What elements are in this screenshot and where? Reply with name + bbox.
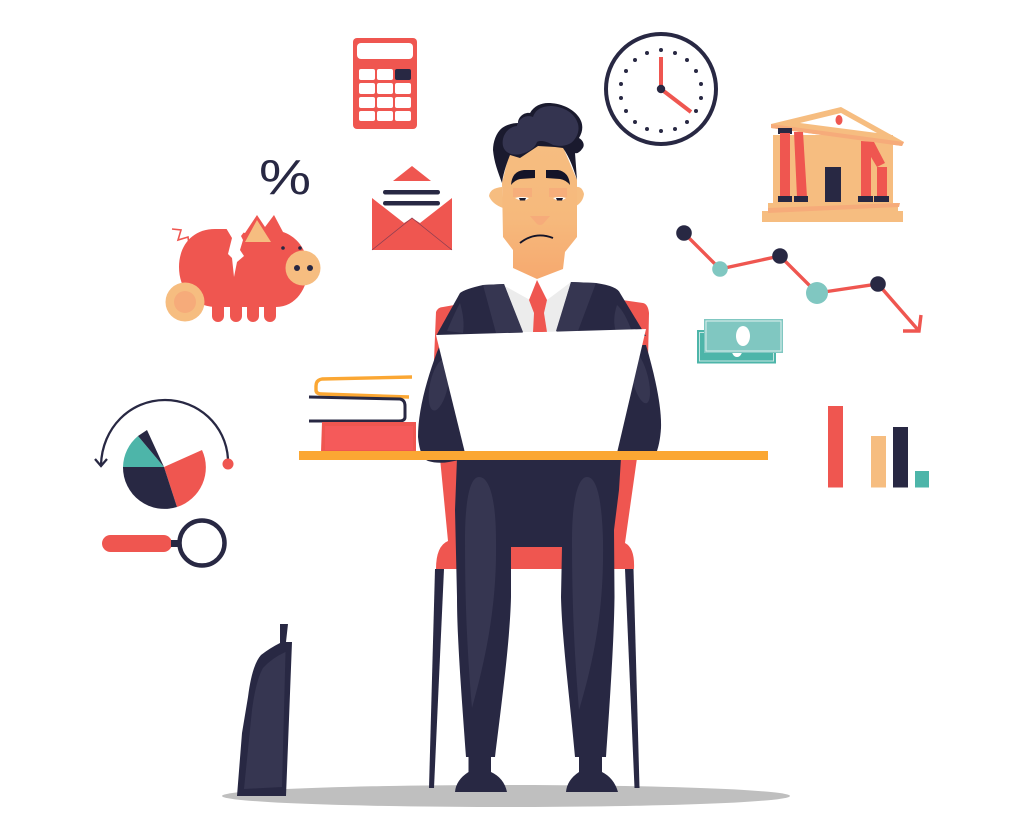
desk xyxy=(299,451,768,460)
neck and head xyxy=(489,145,584,279)
chart: bar chart xyxy=(828,406,929,488)
chart: pie chart with circular arrow xyxy=(95,400,234,509)
suit jacket and arms xyxy=(418,282,661,463)
icon: wall clock xyxy=(606,34,716,144)
icon: magnifying glass xyxy=(102,520,224,566)
icon: percent sign: % xyxy=(259,150,311,205)
briefcase bag on floor xyxy=(237,624,292,796)
icon: cracked piggy bank xyxy=(166,215,320,322)
chart: falling line graph with arrow xyxy=(676,225,921,331)
shoes xyxy=(455,756,618,792)
shirt xyxy=(503,279,571,332)
icon: banknotes xyxy=(697,319,783,364)
businessman xyxy=(418,103,661,792)
chair xyxy=(429,300,649,788)
hair xyxy=(493,103,584,183)
icon: crumbling bank building xyxy=(762,107,904,222)
laptop xyxy=(436,329,646,453)
floor shadow xyxy=(222,785,790,807)
icon: open envelope xyxy=(372,166,452,250)
trousers xyxy=(455,458,621,757)
icon: calculator xyxy=(353,38,417,129)
necktie xyxy=(529,280,547,332)
stack of books xyxy=(309,377,416,452)
